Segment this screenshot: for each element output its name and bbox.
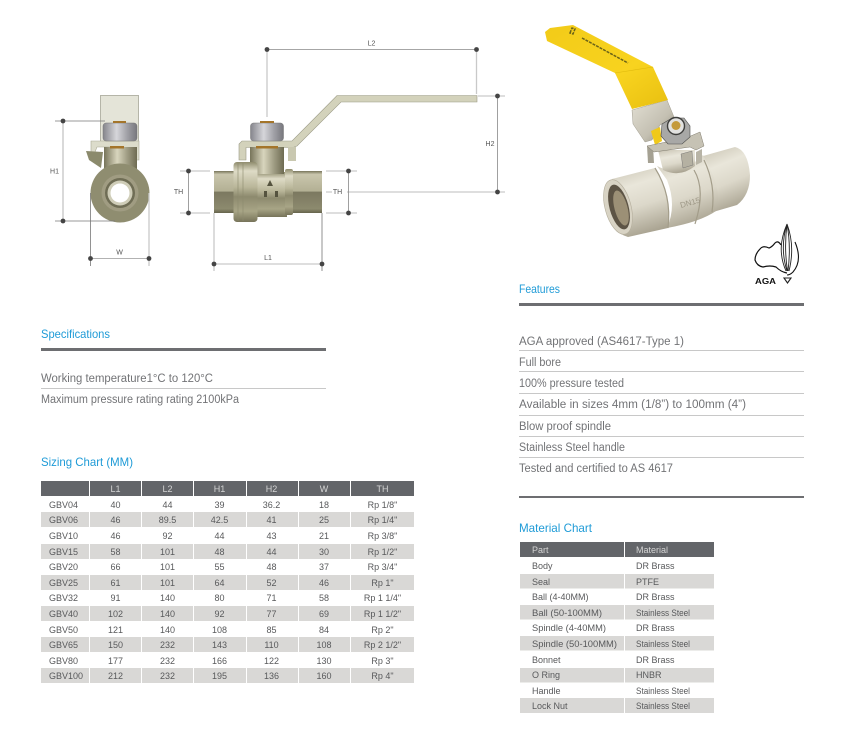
table rows: 232 [160,640,175,650]
table rows: Rp 3/8" [368,531,397,541]
table header: H2 [266,484,277,494]
table rows: GBV06 [49,515,78,525]
table rows: 102 [108,609,123,619]
table rows: GBV15 [49,547,78,557]
table rows: Rp 2 1/2" [364,640,401,650]
table header: L2 [162,484,173,494]
TH dimension left [174,169,210,215]
table rows: Rp 1/8" [368,500,397,510]
material table rows: Stainless Steel [636,701,690,711]
table rows: 101 [160,562,175,572]
material table rows: Body [532,561,553,571]
table rows: 85 [266,625,277,635]
table rows: Rp 1/2" [368,547,397,557]
material table rows: DR Brass [636,623,675,633]
table rows: 36.2 [263,500,280,510]
material table rows: Seal [532,577,550,587]
table rows: 150 [108,640,123,650]
TH dimension right [326,169,357,215]
table rows: Rp 3" [371,656,394,666]
TH dimension right: TH [333,189,342,196]
table: sizing chart [41,481,414,683]
table rows: 64 [214,578,225,588]
table rows: 48 [266,562,277,572]
table rows: 89.5 [159,515,176,525]
table rows: 92 [214,609,225,619]
table rows: 66 [110,562,121,572]
table rows: 108 [212,625,227,635]
table rows: 92 [162,531,173,541]
table rows: GBV10 [49,531,78,541]
L1 dimension [212,213,324,271]
table rows: 52 [266,578,277,588]
heading: features: Features [519,282,560,296]
table rows: 58 [110,547,121,557]
table rows: 166 [212,656,227,666]
table rows: 110 [264,640,279,650]
table rows: 44 [162,500,173,510]
material table rows: Stainless Steel [636,608,690,618]
list: feature items: Available in sizes 4mm (1/8”) to 100mm (4”) [519,399,746,411]
L2 dimension: L2 [368,40,375,48]
list: feature items: Tested and certified to AS 4617 [519,463,673,475]
table rows: Rp 3/4" [368,562,397,572]
table rows: GBV100 [49,671,83,681]
table rows: Rp 1/4" [368,515,397,525]
table rows: 77 [266,609,277,619]
list: feature items [519,336,746,475]
table rows: 18 [319,500,329,510]
list: feature items: Blow proof spindle [519,421,611,433]
table rows: 25 [319,515,329,525]
material table rows: Ball (4-40MM) [532,592,589,602]
photo: yellow-handled brass ball valve: DN15 [679,195,702,210]
material table rows: Ball (50-100MM) [532,608,602,618]
TH dimension left: TH [174,189,183,196]
table rows: GBV40 [49,609,78,619]
diagram: side view of valve with H1 and W dimensions [50,96,151,266]
table rows: 44 [266,547,277,557]
material table rows [532,561,690,711]
table rows: 80 [214,593,225,603]
table rows: Rp 1 1/4" [364,593,401,603]
table rows: Rp 1" [371,578,394,588]
icon: valve front view [214,96,477,222]
table rows: 160 [316,671,332,681]
panel: specifications [41,327,326,406]
table rows: 39 [214,500,225,510]
table rows: 101 [160,547,175,557]
table rows: 42.5 [211,515,228,525]
table rows: 21 [319,531,329,541]
table header: TH [376,484,388,494]
heading: material chart: Material Chart [519,521,593,535]
table rows: 212 [108,671,123,681]
table rows: 48 [214,547,225,557]
table rows: 140 [160,625,175,635]
table rows: 37 [319,562,329,572]
table rows: 232 [160,671,175,681]
H2 dimension: H2 [486,141,495,148]
material table rows: Stainless Steel [636,639,690,649]
material table header [520,542,714,557]
material table rows: Handle [532,686,561,696]
table rows: 130 [316,656,332,666]
table rows: Rp 4" [371,671,394,681]
heading: sizing chart: Sizing Chart (MM) [41,455,133,469]
table rows: 136 [264,671,279,681]
H1 dimension: H1 [50,168,59,176]
table rows: 91 [110,593,121,603]
table rows: 195 [212,671,227,681]
H2 dimension [347,94,505,194]
table rows: 30 [319,547,329,557]
table rows: GBV20 [49,562,78,572]
material table rows: Spindle (4-40MM) [532,623,606,633]
W dimension [88,193,151,266]
table rows: 41 [266,515,277,525]
table rows: 177 [108,656,123,666]
table header: L1 [110,484,121,494]
table rows: Rp 2" [371,625,394,635]
material table rows: PTFE [636,577,659,587]
table rows: 101 [160,578,175,588]
table rows: GBV50 [49,625,78,635]
list: feature items: Stainless Steel handle [519,442,625,454]
table rows: GBV04 [49,500,78,510]
table rows: 71 [266,593,277,603]
table rows: 143 [212,640,227,650]
material table rows: Stainless Steel [636,686,690,696]
table rows: GBV65 [49,640,78,650]
table rows: 232 [160,656,175,666]
material table rows: HNBR [636,670,662,680]
table rows: 40 [110,500,121,510]
table rows: Rp 1 1/2" [364,609,401,619]
L2 dimension [265,40,479,117]
table rows: 55 [214,562,225,572]
panel: features [519,282,804,498]
material table rows: DR Brass [636,561,675,571]
text: maximum pressure: Maximum pressure rating rating 2100kPa [41,394,240,406]
material table rows: DR Brass [636,655,675,665]
table header [41,481,414,496]
table rows: 61 [110,578,121,588]
W dimension: W [116,250,123,256]
photo: yellow-handled brass ball valve [545,25,750,237]
table rows: GBV25 [49,578,78,588]
material table header: Part [532,545,549,555]
table rows: 43 [266,531,277,541]
table rows: 44 [214,531,225,541]
icon: AGA certification logo [755,224,799,286]
icon: valve side view [86,96,150,222]
material table rows: Lock Nut [532,701,568,711]
table rows: GBV32 [49,593,78,603]
table rows: 140 [160,609,175,619]
L1 dimension: L1 [264,255,272,262]
table rows: 46 [319,578,329,588]
material table rows: DR Brass [636,592,675,602]
material table rows: Bonnet [532,655,561,665]
heading: specifications: Specifications [41,327,110,341]
icon: AGA certification logo: AGA [755,277,776,286]
table rows [49,500,401,681]
table header: H1 [214,484,225,494]
table rows: 122 [264,656,279,666]
table rows: 46 [110,515,121,525]
text: working temperature: Working temperature1°C to 120°C [41,373,213,385]
table rows: 84 [319,625,329,635]
list: feature items: AGA approved (AS4617-Type 1) [519,336,684,348]
list: feature items: Full bore [519,357,561,369]
table rows: 121 [108,625,123,635]
diagram: front view of valve with L1, L2, H2 and TH dimensions [174,40,505,271]
material table header: Material [636,545,668,555]
material table rows: Spindle (50-100MM) [532,639,617,649]
H1 dimension [50,119,115,223]
table rows: 58 [319,593,329,603]
table rows: 46 [110,531,121,541]
table rows: 108 [316,640,332,650]
table rows: GBV80 [49,656,78,666]
list: feature items: 100% pressure tested [519,378,624,390]
table rows: 140 [160,593,175,603]
table header: W [320,484,329,494]
table rows: 69 [319,609,329,619]
material table rows: O Ring [532,670,560,680]
table: material chart [520,542,714,713]
